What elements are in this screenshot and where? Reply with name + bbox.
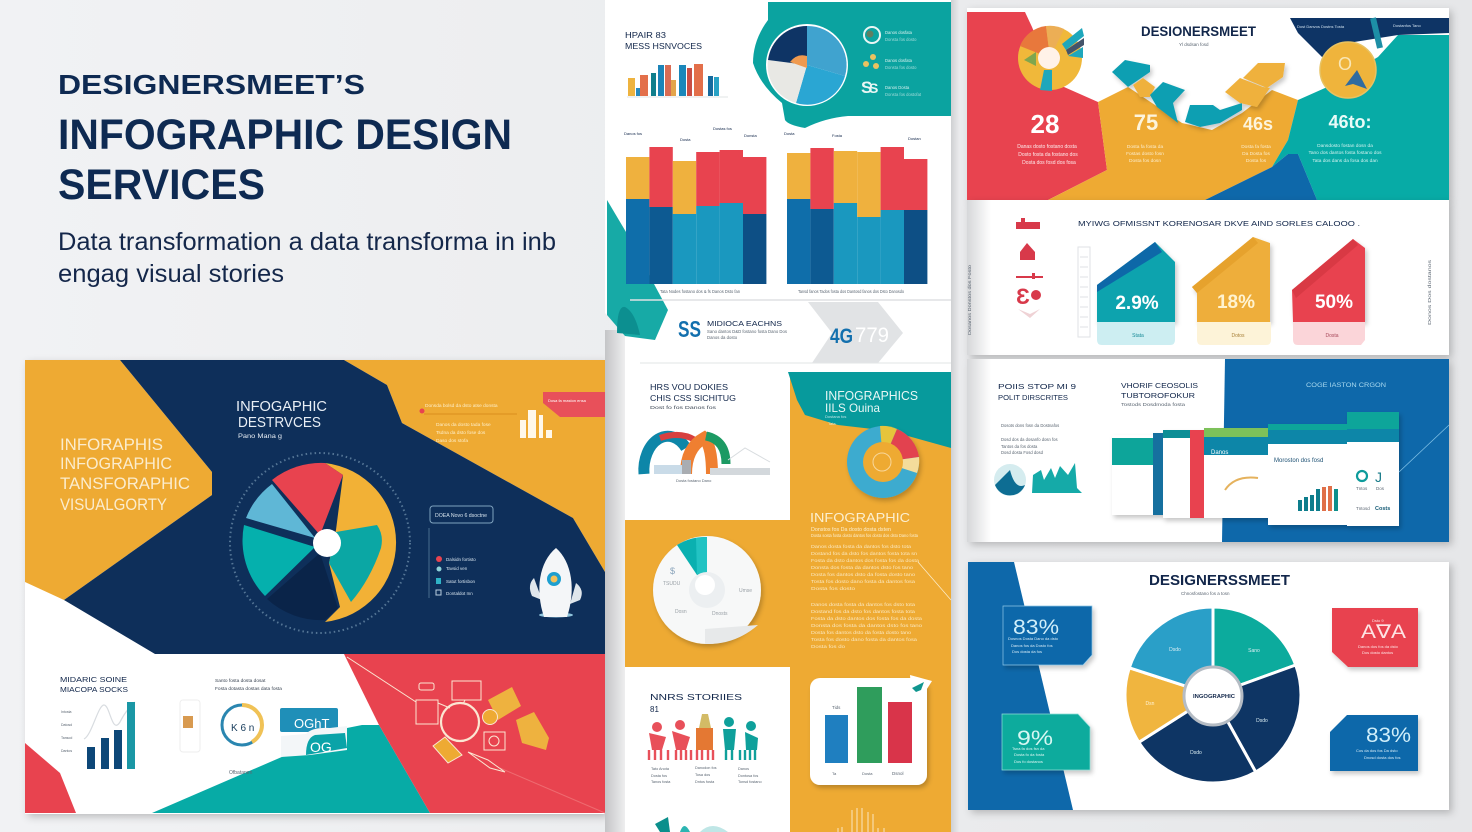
strip with logo and chevron: MIDIOCA EACHNS bbox=[707, 319, 782, 328]
blue stat cards: OGhT bbox=[294, 716, 329, 731]
section heading bbox=[625, 31, 702, 51]
screens group: J bbox=[1375, 469, 1382, 485]
screens group bbox=[1112, 412, 1399, 526]
left heading bbox=[650, 383, 736, 410]
light blue slice bbox=[246, 484, 315, 538]
legend: Tavsid ven bbox=[446, 566, 468, 571]
main title: INFOGRAPHIC DESIGN bbox=[58, 111, 512, 159]
bottom teal cropped illustration bbox=[655, 817, 728, 832]
teal right slice bbox=[329, 525, 382, 602]
teal left slice bbox=[243, 525, 315, 596]
stat box blue: 83% bbox=[1013, 616, 1059, 639]
left heading text: INFOGRAPHIC bbox=[60, 454, 172, 473]
donut disc chart: Umse bbox=[739, 588, 752, 594]
stacked bars right: Dosta bbox=[784, 131, 795, 136]
shadow right of the middle column bbox=[951, 0, 959, 832]
screen four bbox=[1268, 424, 1347, 525]
stat number orange 2: Dosta fos bbox=[1246, 158, 1267, 164]
orange column text: Dosta fos dosto bbox=[811, 586, 856, 591]
orange left shape bbox=[25, 360, 212, 600]
strip with logo and chevron: SS bbox=[678, 316, 701, 342]
icon list: S bbox=[861, 78, 872, 97]
strip with logo and chevron: Danos da dosto bbox=[707, 335, 738, 340]
orange column text: Dosta fos dantos dsto da fosta dosto tano bbox=[811, 572, 916, 577]
stat number red: Danas dosto fostano dosta bbox=[1017, 144, 1077, 150]
screens group: Dos bbox=[1376, 486, 1385, 491]
donut chart bbox=[847, 426, 919, 498]
blue shape bbox=[1205, 154, 1317, 200]
red shape bbox=[967, 12, 1107, 200]
stacked bars right: Dostan bbox=[908, 136, 921, 141]
red tag with small bar icon: Tsdna da dsto fose dos bbox=[436, 430, 486, 436]
stat box teal: Dos fo dostanos bbox=[1014, 759, 1043, 764]
blue stat cards: OG bbox=[310, 739, 332, 755]
panel: pie and stat boxes bbox=[968, 562, 1449, 810]
people pictogram: Danos bbox=[738, 767, 749, 771]
slice labels: Dsdo bbox=[1169, 647, 1181, 653]
icon list: Donsta fos dosto bbox=[885, 65, 917, 70]
arc chart: Dosta fostano Dano bbox=[676, 478, 712, 483]
orange column text: Dosta fos do bbox=[811, 644, 846, 649]
bar chart: Tansod bbox=[61, 736, 72, 740]
vertical side labels: Dosanos Donstos dos Fosto bbox=[967, 264, 972, 335]
center heading text: DESTRVCES bbox=[238, 414, 321, 431]
stat box blue right bbox=[1330, 715, 1418, 771]
red right shape bbox=[344, 654, 605, 813]
strip with logo and chevron: Sano dantos D&D fostano fosta Dano Dos bbox=[707, 329, 787, 334]
red card bbox=[1292, 239, 1365, 345]
stacked bars left: Dostas fos bbox=[713, 126, 732, 131]
small text: Dosd dosta Fosd dosd bbox=[1001, 450, 1044, 455]
orange column text: INFOGRAPHIC bbox=[810, 510, 910, 525]
orange column text: Tosta fos dosto dano fosta da dantos fosa bbox=[811, 637, 918, 642]
screens group: Moroston dos fosd bbox=[1274, 458, 1323, 464]
gold coin icon: O bbox=[1338, 54, 1352, 74]
people pictogram: Dntos fosta bbox=[695, 780, 715, 784]
right vertical label: Donos Dos dostanos bbox=[1427, 259, 1432, 325]
red tag with small bar icon bbox=[420, 392, 605, 444]
stat box red: A∇A bbox=[1361, 622, 1406, 643]
icon list: Danos dosfata bbox=[885, 30, 913, 35]
subtitle: Data transformation a data transforma in inb bbox=[58, 228, 556, 256]
bottom left heading bbox=[60, 675, 128, 694]
navy background shape bbox=[64, 360, 605, 654]
wave tags bbox=[1112, 60, 1285, 127]
bar chart: Intosta bbox=[61, 710, 72, 714]
icon list: Donsta fos dosto bbox=[885, 37, 917, 42]
left heading: Dost fo fos Danos fos bbox=[650, 405, 717, 410]
orange column text: Tosta fos dosto dano fosta da dantos fosa bbox=[811, 579, 916, 584]
stat box blue: Danos fos da Dosto fos bbox=[1011, 643, 1053, 648]
stat box red: Danos dos fos da dsto bbox=[1358, 644, 1399, 649]
slice labels: Sano bbox=[1248, 648, 1260, 654]
people pictogram: Dosta fos bbox=[651, 774, 667, 778]
left heading text: TANSFORAPHIC bbox=[60, 474, 190, 493]
slice labels bbox=[1146, 647, 1268, 756]
legend: Satut fortisbon bbox=[446, 579, 476, 584]
people pictogram: Tosa dos bbox=[695, 773, 710, 777]
left heading: HRS VOU DOKIES bbox=[650, 383, 728, 392]
bar chart bbox=[61, 702, 135, 769]
orange column text: Fosta da dsto dantos dos fosta fos da dosta bbox=[811, 558, 920, 563]
title sub text: Chnosfostano fos a tosn bbox=[1181, 591, 1230, 596]
bar chart: Dantos bbox=[61, 749, 72, 753]
stat number orange 2: Da Dosta fos bbox=[1242, 151, 1270, 157]
legend: Dontaldot Inn bbox=[446, 591, 473, 596]
stories heading bbox=[650, 693, 742, 714]
stat number teal: Tata dos dans da fosa dos dan bbox=[1312, 158, 1378, 164]
stacked bars right: Fosta bbox=[832, 133, 843, 138]
orange column text: Dostand fos da dsto fos dantos fosta tota bbox=[811, 609, 916, 614]
panel: column top with stacked bars bbox=[605, 0, 951, 363]
center heading text: Pano Mana g bbox=[238, 434, 282, 440]
small circular chart group: Ofbatanen bbox=[229, 770, 253, 776]
small text: Dosd dos da dosanfo dosn fos bbox=[1001, 437, 1058, 442]
panel: colored wave infographic: Dostanfos Tano bbox=[1393, 23, 1421, 28]
title: DESIONERSMEET bbox=[1141, 24, 1257, 39]
red tag with small bar icon: Danos da dosto tada fose bbox=[436, 422, 491, 428]
center heading text: INFOGAPHIC bbox=[236, 398, 327, 415]
stacked bars left: Dosta bbox=[680, 137, 691, 142]
heading block bbox=[58, 69, 556, 288]
screen three bbox=[1204, 428, 1268, 518]
teal decorative stripe bbox=[607, 200, 668, 340]
stories heading: 81 bbox=[650, 705, 659, 714]
section heading: MESS HSNVOCES bbox=[625, 42, 702, 51]
orange column text: Dosta fos dantos dsto da fosta dosto tano bbox=[811, 630, 912, 635]
stat number teal: Dansdosto fostan dosn da bbox=[1317, 143, 1373, 149]
stat box blue right: Cos da dos fos Da dsto bbox=[1356, 748, 1398, 753]
panel: colored wave infographic bbox=[967, 8, 1449, 200]
small bar chart bbox=[627, 64, 728, 97]
left heading: CHIS CSS SICHITUG bbox=[650, 394, 736, 403]
teal header text: IILS Ouina bbox=[825, 401, 880, 415]
stat number orange 1: 75 bbox=[1134, 110, 1158, 135]
teal card: 2.9% bbox=[1115, 293, 1159, 314]
heading left bbox=[998, 382, 1076, 402]
small text bbox=[1001, 423, 1059, 455]
orange column text: Danos dosta fosta da dantos fos dsto tota bbox=[811, 544, 912, 549]
stat number red bbox=[1017, 109, 1078, 166]
main title second line: SERVICES bbox=[58, 161, 265, 209]
stat box blue bbox=[1003, 606, 1092, 665]
hub bbox=[1184, 667, 1242, 725]
stories heading: NNRS STORIIES bbox=[650, 693, 742, 702]
people pictogram bbox=[649, 714, 762, 784]
teal card bbox=[1097, 242, 1175, 345]
section title: MYIWG OFMISSNT KORENOSAR DKVE AIND SORLES CALOOO . bbox=[1078, 219, 1360, 228]
orange slice bbox=[325, 463, 396, 622]
teal header bbox=[788, 372, 951, 448]
teal bottom shape bbox=[152, 725, 430, 813]
stat number orange 1 bbox=[1126, 110, 1164, 164]
small circular chart group: Fosta dotasta dostas data fosta bbox=[215, 686, 282, 692]
title sub text: Yl dsdsan fosd bbox=[1179, 42, 1209, 47]
orange mid panel bbox=[625, 520, 790, 667]
ruler bbox=[1078, 247, 1090, 337]
stacked bars left: Tata Nodes fostano dos & fs Danos Dsto fan bbox=[660, 289, 741, 294]
legend: Dalsidn fortisto bbox=[446, 557, 476, 562]
icon list bbox=[861, 27, 922, 97]
blue background bbox=[1222, 359, 1449, 542]
screens group: Tntos bbox=[1356, 486, 1368, 491]
icon: sticker bbox=[910, 675, 932, 692]
pie chart bbox=[230, 453, 410, 633]
stat number teal: 46to: bbox=[1328, 112, 1372, 132]
stat box blue right: Dnosd dosta dos fos bbox=[1364, 755, 1400, 760]
stat number teal bbox=[1308, 112, 1382, 164]
teal slice bbox=[1213, 607, 1296, 695]
teal header text bbox=[825, 388, 918, 426]
orange card bbox=[1192, 237, 1271, 345]
stat box teal: Tsna fa dos fsn da bbox=[1012, 746, 1045, 751]
small text: Dosots dons fosn da Dostnafos bbox=[1001, 423, 1059, 428]
slice labels: Dsdo bbox=[1256, 718, 1268, 724]
bar chart card: Ta bbox=[832, 771, 837, 776]
teal shape bbox=[1272, 35, 1449, 200]
orange card: Dotos bbox=[1231, 333, 1245, 339]
left heading text: INFORAPHIS bbox=[60, 435, 163, 454]
bar chart card: Dsnol bbox=[892, 771, 904, 776]
orange tag icons bbox=[488, 687, 521, 720]
red tag with small bar icon: Donsda bolsd da dsto atse donsta bbox=[425, 403, 498, 409]
stat box teal bbox=[1002, 714, 1090, 770]
blue side shape bbox=[968, 562, 1073, 810]
orange shape bbox=[1048, 87, 1298, 200]
panel: navy and orange infographic bbox=[25, 360, 605, 814]
red icon stack bbox=[1016, 218, 1043, 318]
stat box red bbox=[1332, 608, 1418, 667]
left heading text: VISUALGORTY bbox=[60, 495, 167, 514]
people pictogram: Dontosa fos bbox=[738, 774, 758, 778]
donut disc chart: Dosn bbox=[675, 609, 687, 615]
orange right column bbox=[790, 372, 951, 832]
icon list: S bbox=[869, 80, 878, 96]
heading middle: VHORIF CEOSOLIS bbox=[1121, 381, 1198, 390]
stat box teal: Dosta fo da fosta bbox=[1014, 752, 1045, 757]
section heading: HPAIR 83 bbox=[625, 31, 667, 40]
arc chart bbox=[644, 435, 770, 483]
stacked bars left: Danos fos bbox=[624, 131, 642, 136]
heading middle bbox=[1121, 381, 1198, 407]
people pictogram: Tonsd fostano bbox=[738, 780, 762, 784]
panel: percent cards bbox=[967, 200, 1449, 355]
teal ball and skyline bbox=[994, 463, 1082, 496]
screens group: Danos bbox=[1211, 450, 1228, 456]
bottom left heading: MIDARIC SOINE bbox=[60, 675, 127, 684]
screen five bbox=[1347, 412, 1399, 526]
stat box blue right: 83% bbox=[1366, 724, 1411, 747]
stacked bars left: Donsta bbox=[744, 133, 757, 138]
red card: 50% bbox=[1315, 292, 1353, 313]
subtitle second line: engag visual stories bbox=[58, 260, 284, 288]
donut disc chart: Dnosts bbox=[712, 611, 728, 617]
outer tick ring bbox=[230, 453, 410, 633]
red tag with small bar icon: Daso dos stofa bbox=[436, 438, 468, 444]
strip with logo and chevron: 779 bbox=[855, 324, 889, 347]
heading middle: TUBTOROFOKUR bbox=[1121, 391, 1196, 400]
pale skyline lines bbox=[838, 808, 884, 832]
orange right shape bbox=[344, 360, 605, 572]
slice labels: Dsn bbox=[1146, 701, 1155, 707]
legend bbox=[429, 506, 493, 598]
icon list: Danos Dosta bbox=[885, 85, 910, 90]
small text: Tantos da fos dosta bbox=[1001, 444, 1038, 449]
stat box blue: Dos dosta da fos bbox=[1012, 649, 1042, 654]
center heading text bbox=[236, 398, 327, 440]
red icon stack: Ɛ bbox=[1016, 284, 1030, 309]
navy banner bbox=[1290, 18, 1449, 57]
teal header text: INFOGRAPHICS bbox=[825, 388, 918, 403]
donut disc chart: $ bbox=[670, 566, 675, 576]
stat number red: Dosta dos fosd dos fosa bbox=[1022, 160, 1076, 166]
stat number red: 28 bbox=[1031, 109, 1059, 139]
left gray strip of the middle column bbox=[605, 330, 625, 832]
red corner shape bbox=[25, 743, 76, 813]
icon list: Donsta fos dostofat bbox=[885, 92, 922, 97]
red tag with small bar icon: Dosa fa maston ensa bbox=[548, 398, 587, 403]
screen one bbox=[1112, 435, 1153, 515]
orange column text: Donsta dos fosta da dantos dsto fos tano bbox=[811, 623, 923, 628]
bar chart card: Dosta bbox=[862, 771, 873, 776]
stat box blue: Dosnos Dosta Dano da dsto bbox=[1008, 636, 1059, 641]
bar chart card bbox=[810, 675, 932, 785]
people pictogram: Danodon fos bbox=[695, 766, 717, 770]
strip with logo and chevron: 4G bbox=[830, 325, 853, 348]
strip with logo and chevron bbox=[678, 302, 903, 363]
stat number teal: Tano dos dantos fosta fostano dos bbox=[1308, 150, 1382, 156]
navy slice right bbox=[1213, 665, 1301, 772]
navy slice bottom bbox=[1139, 695, 1256, 783]
stat number orange 1: Dosta fa fosta da bbox=[1127, 144, 1163, 150]
heading left: POLIT DIRSCRITES bbox=[998, 393, 1068, 402]
stat box red: Dsto 9 bbox=[1372, 618, 1384, 623]
stat number orange 2: 46s bbox=[1243, 114, 1273, 134]
teal header text: Tata bbox=[828, 421, 836, 426]
pie chart bbox=[766, 24, 848, 106]
icon: rocket bbox=[530, 548, 582, 618]
bottom left heading: MIACOPA SOCKS bbox=[60, 685, 128, 694]
blue stat cards bbox=[280, 708, 347, 757]
orange column text: Danos dosta fosta da dantos fos dsto tota bbox=[811, 602, 916, 607]
bar chart: Datosd bbox=[61, 723, 72, 727]
left heading text bbox=[60, 435, 190, 514]
people pictogram: Tato Anota bbox=[651, 767, 670, 771]
red slice bbox=[272, 463, 343, 535]
title: DESIGNERSSMEET bbox=[1149, 572, 1290, 589]
small circular chart group: Santo fosta dosta dosat bbox=[215, 678, 266, 684]
blue slice bbox=[1129, 607, 1213, 695]
people pictogram: Tanos fosta bbox=[651, 780, 671, 784]
orange card: 18% bbox=[1217, 292, 1255, 313]
stacked bars right bbox=[784, 131, 927, 294]
gold coin icon bbox=[1320, 42, 1376, 98]
stat box red: Dos dosto dantos bbox=[1362, 650, 1393, 655]
stat number orange 1: Dosta fos dosn bbox=[1129, 158, 1161, 164]
screen two bbox=[1163, 430, 1190, 518]
panel: screens bbox=[967, 359, 1449, 542]
eyebrow title: DESIGNERSMEET’S bbox=[58, 69, 365, 100]
teal corner with pie bbox=[753, 2, 951, 128]
blue panel heading: COGE IASTON CRGON bbox=[1306, 382, 1386, 389]
hub label: INGOGRAPHIC bbox=[1193, 694, 1235, 700]
screens group: Costs bbox=[1375, 506, 1390, 512]
stat number red: Dosto fosta da fostano dos bbox=[1018, 152, 1078, 158]
heading middle: Tostods Dosdmoda fosta bbox=[1121, 402, 1186, 407]
donut disc chart bbox=[653, 536, 761, 644]
red card: Dosta bbox=[1325, 333, 1339, 339]
stat number orange 2 bbox=[1241, 114, 1273, 164]
orange column text: Dosta sosta fosta dosto dantos fos dosto dos dsto Dano fosta bbox=[811, 533, 918, 538]
orange column text: Donstos fos Da dosto dosta dsten bbox=[811, 527, 891, 533]
stacked bars left bbox=[624, 126, 766, 294]
orange column text: Donsta dos fosta da dantos dsto fos tano bbox=[811, 565, 914, 570]
orange column text: Fosta da dsto dantos dos fosta fos da dosta bbox=[811, 616, 923, 621]
small circular chart group bbox=[180, 678, 282, 776]
stat number orange 1: Fostas dosto fosn bbox=[1126, 151, 1164, 157]
slice labels: Dsdo bbox=[1190, 750, 1202, 756]
orange column text: Dostand fos da dsto fos dantos fosta tota sn bbox=[811, 551, 918, 556]
pie chart bbox=[1125, 607, 1301, 783]
bar chart card: Tids bbox=[832, 705, 841, 710]
stat number orange 2: Dosta fa fosta bbox=[1241, 144, 1271, 150]
stat box teal: 9% bbox=[1017, 727, 1053, 750]
colorful pie icon bbox=[1018, 26, 1084, 91]
panel: colored wave infographic: Dost Danvos Dostns Tosta bbox=[1297, 24, 1345, 29]
small circular chart group: K 6 n bbox=[231, 723, 254, 734]
hub bbox=[313, 529, 341, 557]
heading left: POIIS STOP MI 9 bbox=[998, 382, 1076, 391]
teal header text: Dostana fos bbox=[825, 414, 846, 419]
icon list: Danos dosfata bbox=[885, 58, 913, 63]
orange column text bbox=[810, 510, 951, 649]
screens group: Tntosd bbox=[1356, 506, 1370, 511]
legend: DOEA Novo 6 dsoctne bbox=[435, 513, 487, 519]
donut disc chart: TSUDU bbox=[663, 581, 681, 587]
doodle illustration bbox=[347, 657, 605, 813]
stacked bars right: Tansd fanos Tados fosta dos Dantosd fanos dos Dsto Danosdo bbox=[798, 289, 905, 294]
panel: column lower bbox=[625, 363, 951, 832]
yellow slice bbox=[1125, 668, 1213, 742]
dark bottom slice bbox=[267, 553, 338, 620]
teal card: Stata bbox=[1132, 333, 1144, 339]
